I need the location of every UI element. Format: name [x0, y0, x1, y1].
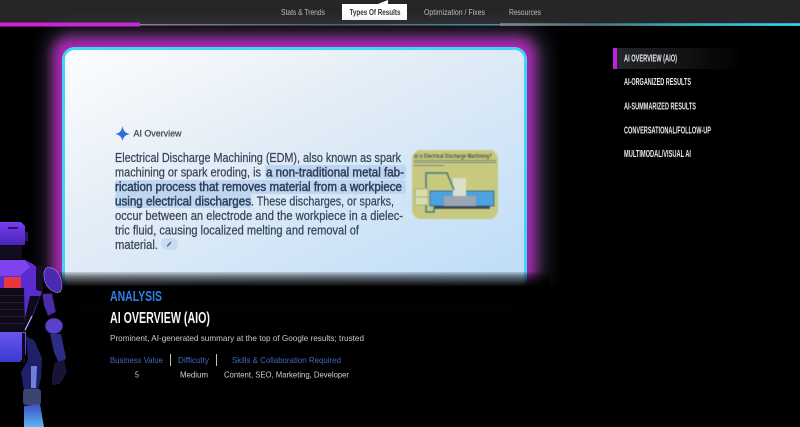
icon: sparkle — [115, 126, 130, 141]
table headers — [110, 356, 341, 365]
nav item: Optimization / Fixes: Optimization / Fixes — [424, 8, 485, 17]
table values — [135, 370, 349, 380]
robot arm — [42, 293, 56, 316]
citation chip — [161, 238, 178, 250]
robot shoulder — [36, 266, 43, 292]
nav item: Resources: Resources — [509, 8, 541, 17]
robot lower leg — [24, 404, 44, 427]
table: metrics — [110, 354, 349, 380]
navigation bar — [0, 0, 800, 24]
AI overview paragraph: material. — [115, 238, 158, 252]
progress line — [0, 22, 800, 26]
AI Overview header: AI Overview — [134, 128, 182, 140]
robot upper leg — [21, 336, 42, 390]
table values: Medium — [180, 370, 208, 380]
card frame and fill — [64, 48, 526, 288]
table headers: Business Value — [110, 356, 163, 365]
heading: analysis: ANALYSIS — [110, 289, 162, 305]
nav tab: Types Of Results (active) — [342, 0, 407, 20]
screenshot card with neon frame — [30, 32, 560, 306]
table values: Content, SEO, Marketing, Developer — [224, 370, 349, 380]
description: Prominent, AI-generated summary at the top of Google results; trusted — [110, 334, 364, 343]
nav tab: Types Of Results (active): Types Of Results — [350, 8, 401, 17]
analysis section — [110, 289, 364, 380]
robot chest panel — [4, 277, 21, 288]
AI overview paragraph: tric fluid, causing localized melting and removal of — [115, 224, 359, 238]
menu item: CONVERSATIONAL/FOLLOW-UP — [624, 126, 711, 136]
AI overview paragraph: rication process that removes material from a workpiece — [115, 180, 402, 194]
robot torso — [0, 260, 42, 332]
AI overview paragraph: occur between an electrode and the workpiece in a dielec- — [115, 209, 403, 223]
AI overview paragraph: . These discharges, or sparks, — [251, 194, 394, 208]
AI Overview header — [115, 126, 182, 141]
side menu — [613, 48, 743, 160]
card glow — [50, 32, 542, 290]
robot neck — [0, 245, 22, 259]
robot head — [0, 222, 25, 245]
bottom fade — [40, 272, 550, 287]
robot hand — [52, 360, 67, 385]
AI overview paragraph: using electrical discharges — [115, 194, 251, 208]
menu item: MULTIMODAL/VISUAL AI — [624, 149, 691, 160]
AI overview paragraph — [115, 151, 406, 252]
nav item: Stats & Trends: Stats & Trends — [281, 8, 325, 17]
table headers: Skills & Collaboration Required — [232, 356, 341, 365]
table headers: Difficulty — [178, 356, 210, 365]
robot illustration — [0, 222, 67, 427]
menu item: AI-ORGANIZED RESULTS — [624, 77, 691, 88]
AI overview paragraph: a non-traditional metal fab- — [266, 166, 404, 180]
AI overview paragraph: Electrical Discharge Machining (EDM), also known as spark — [115, 151, 402, 165]
diagram thumbnail: electrical discharge machining: at is Electrical Discharge Machining? — [414, 154, 492, 160]
table values: 5 — [135, 370, 139, 380]
heading: AI Overview (AIO): AI OVERVIEW (AIO) — [110, 310, 210, 327]
diagram thumbnail: electrical discharge machining — [412, 150, 498, 219]
highlighted phrase — [115, 165, 406, 208]
menu item: active: AI OVERVIEW (AIO) — [624, 54, 677, 64]
menu item: AI-SUMMARIZED RESULTS — [624, 102, 696, 112]
robot knee — [23, 389, 41, 405]
AI overview paragraph: machining or spark eroding, is — [115, 166, 261, 180]
robot pelvis — [0, 332, 26, 362]
